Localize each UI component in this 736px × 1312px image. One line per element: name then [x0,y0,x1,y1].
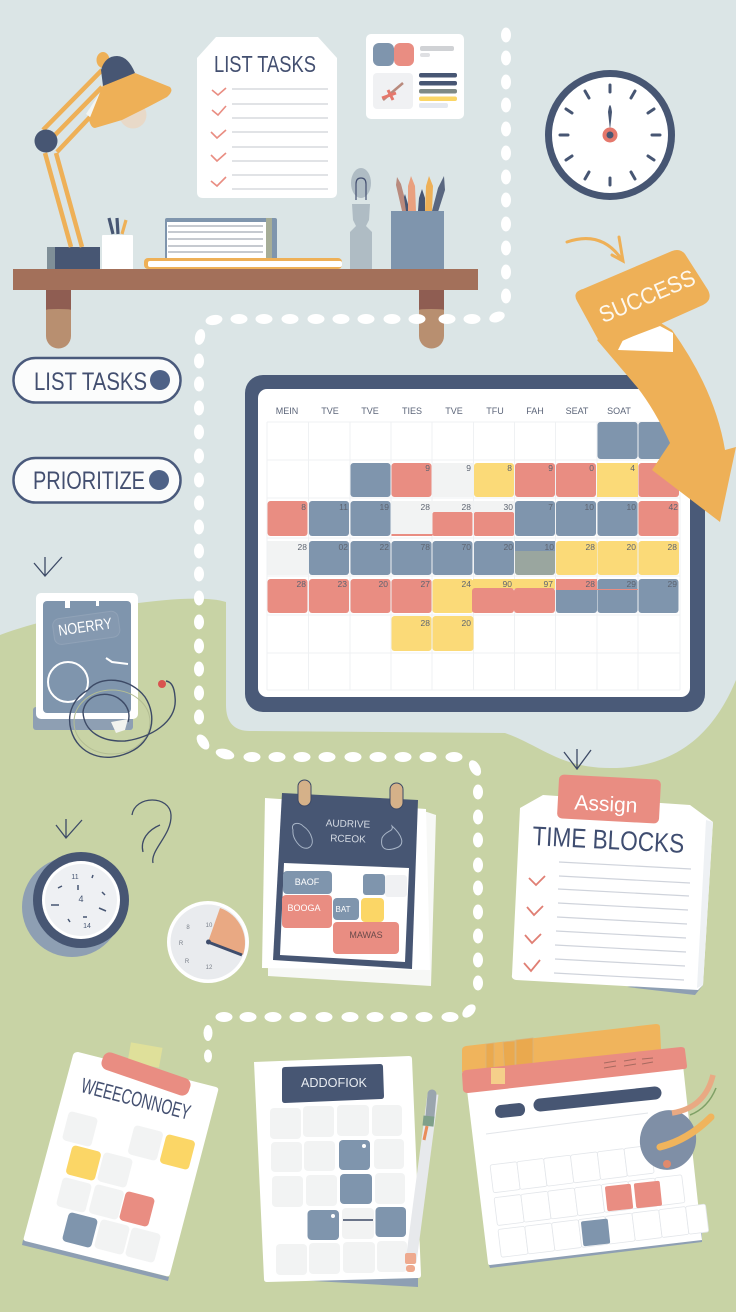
panel: block schedule sheet: ADDOFIOK [301,1076,368,1090]
panel: monthly wall calendar [262,780,436,986]
dotted path [193,28,511,1062]
calendar numbers: 23 [338,579,347,589]
desk items: pen cup [102,218,133,270]
desk items: figurine [350,168,372,269]
clock: bottom left dark: 11 [71,874,79,881]
calendar numbers: 90 [503,579,512,589]
scribble line [70,680,175,757]
chart: pie clock: 10 [206,923,213,929]
calendar numbers: 19 [380,502,389,512]
calendar numbers: 28 [297,579,306,589]
weekday labels: SOAT [607,406,631,416]
calendar numbers: 27 [421,579,430,589]
calendar numbers: 11 [339,502,348,512]
background: pale blue wall [0,0,736,768]
calendar rings [298,780,311,806]
calendar numbers: 24 [462,579,471,589]
highlighted planner cells [605,1184,633,1211]
desk items: open book [144,218,342,269]
arrow: down mark 2 [56,819,82,838]
calendar grid lines [267,422,680,690]
calendar numbers: 28 [586,542,595,552]
label: success tag [575,250,710,343]
calendar numbers: 10 [585,502,594,512]
calendar numbers: 9 [548,463,553,473]
calendar numbers: 28 [462,502,471,512]
orange cover [462,1024,661,1072]
arrow: down mark 3 [564,749,591,769]
heading: time blocks: TIME BLOCKS [532,821,685,859]
heading: list tasks: LIST TASKS [214,51,316,77]
calendar numbers: 70 [462,542,471,552]
calendar numbers: 29 [668,579,677,589]
weekday labels: FAH [526,406,544,416]
calendar numbers: 9 [466,463,471,473]
calendar numbers: 20 [627,542,636,552]
calendar numbers: 97 [544,579,553,589]
panel: notepad with scribble: NOERRY [57,615,113,640]
tag: assign [557,774,661,824]
clock: bottom left dark [22,852,129,957]
arrow: small curved orange [567,237,623,261]
arrow: down mark 1 [34,557,62,576]
weekday labels: MEIN [276,406,298,416]
icon: question squiggle [132,800,171,863]
weekday labels [276,406,631,416]
week cells [56,1111,196,1263]
calendar numbers: 20 [462,618,471,628]
calendar numbers: 9 [425,463,430,473]
desk items: pencil holder [391,176,445,270]
calendar numbers: 78 [421,542,430,552]
calendar numbers: 29 [627,579,636,589]
weekday labels: TFU [486,406,504,416]
chart: pie clock: R [179,941,184,947]
calendar numbers: 20 [504,542,513,552]
panel: monthly wall calendar: BOOGA [287,903,321,913]
weekday labels: TIES [402,406,422,416]
calendar numbers: 4 [630,463,635,473]
panel: assign time blocks paper [512,774,713,995]
clock: top right [545,70,675,200]
red band [462,1047,687,1093]
button: prioritize [14,458,180,502]
panel: planner book [462,1024,716,1268]
panel: monthly wall calendar: BAT [336,905,351,914]
title: WEEECONNOEY [79,1074,193,1125]
panel: notepad with scribble [33,593,175,757]
panel: monthly wall calendar: BAOF [295,877,320,887]
icon: round ornament [633,1075,716,1176]
chart: pie clock: 8 [186,925,190,931]
calendar numbers: 30 [504,502,513,512]
panel: weekly clipboard [22,1042,218,1281]
panel: small palette card [366,34,464,119]
calendar numbers: 28 [668,542,677,552]
panel: monthly wall calendar: AUDRIVE [326,818,371,831]
calendar numbers: 28 [586,579,595,589]
icon: pencil [405,1094,434,1272]
calendar numbers: 10 [545,542,554,552]
calendar numbers: 28 [421,502,430,512]
panel: block schedule sheet [254,1056,434,1287]
weekday labels: TVE [321,406,339,416]
weekday labels: TVE [445,406,463,416]
schedule cells [270,1105,407,1275]
chart: pie clock [167,901,249,983]
chart: pie clock: 12 [206,965,213,971]
panel: monthly wall calendar: MAWAS [349,930,383,940]
calendar numbers: 02 [339,542,348,552]
header bar [282,1064,384,1103]
button: list tasks [14,358,180,402]
weekday labels: SEAT [566,406,589,416]
panel: assign time blocks paper: Assign [574,791,638,818]
calendar numbers: 22 [380,542,389,552]
calendar numbers [297,463,678,628]
calendar cells [268,422,679,651]
panel: list tasks paper [197,37,337,198]
planner grid [490,1140,709,1257]
ruled lines [232,89,328,189]
clip [128,1042,162,1068]
check marks [211,88,226,186]
calendar numbers: 8 [301,502,306,512]
calendar numbers: 20 [379,579,388,589]
arrow: large orange success arrow [575,250,736,522]
panel: calendar tablet [245,375,705,712]
clock: bottom left dark: 4 [78,894,84,904]
chart: pie clock: R [185,959,190,965]
button: list tasks: LIST TASKS [34,368,147,396]
panel: monthly wall calendar: RCEOK [330,833,366,846]
calendar numbers: 28 [298,542,307,552]
shelf [13,269,478,348]
arrow: large orange success arrow: SUCCESS [595,264,699,328]
calendar numbers: 42 [669,502,678,512]
lamp [34,52,171,270]
calendar numbers: 8 [507,463,512,473]
calendar numbers: 10 [627,502,636,512]
calendar numbers: 28 [421,618,430,628]
calendar numbers: 0 [589,463,594,473]
weekday labels: TVE [361,406,379,416]
dark title pills [494,1102,526,1119]
button: prioritize: PRIORITIZE [33,467,145,495]
clock: bottom left dark: 14 [83,923,91,930]
calendar numbers: 7 [548,502,553,512]
